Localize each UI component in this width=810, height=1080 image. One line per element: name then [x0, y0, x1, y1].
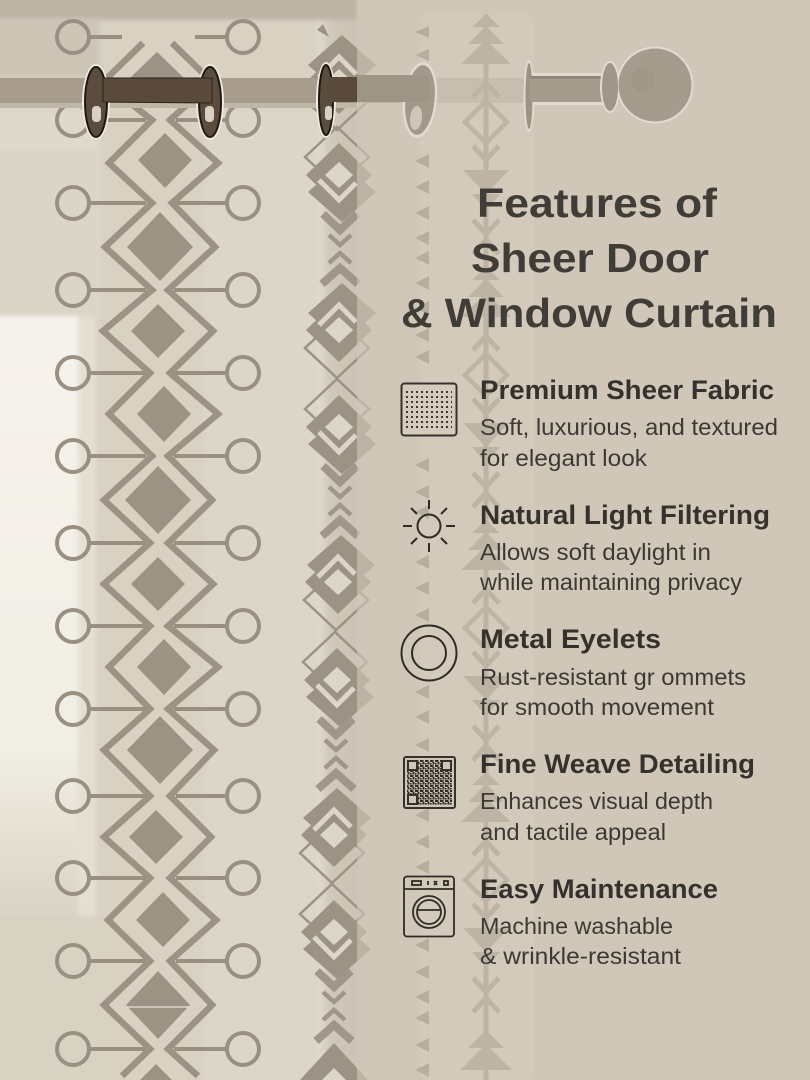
- feature text: premium sheer fabric: Soft, luxurious, and textured: [480, 414, 778, 440]
- feature text: metal eyelets: [480, 624, 746, 720]
- feature: easy maintenance: [404, 874, 718, 969]
- light sheer curtain panel: [420, 14, 534, 1080]
- rings and connectors, right side: [174, 21, 259, 1065]
- curtain pattern: stacked diamond column: [300, 24, 376, 1080]
- feature text: natural light filtering: while maintaining privacy: [479, 569, 742, 595]
- feature text: easy maintenance: [480, 874, 718, 969]
- feature text: natural light filtering: [479, 500, 770, 595]
- grommet: third: [316, 62, 336, 138]
- feature text: premium sheer fabric: Premium Sheer Fabric: [480, 375, 774, 405]
- feature text: fine weave detailing: Fine Weave Detailing: [480, 749, 755, 779]
- feature text: fine weave detailing: Enhances visual depth: [480, 788, 713, 814]
- feature: fine weave detailing: [404, 749, 755, 845]
- feature: natural light filtering: [403, 500, 770, 595]
- zigzag outlines: [103, 43, 218, 1076]
- title: Sheer Door: [471, 235, 709, 281]
- feature text: easy maintenance: & wrinkle-resistant: [480, 943, 681, 969]
- title: [401, 180, 777, 336]
- finial: [524, 46, 694, 132]
- feature text: premium sheer fabric: for elegant look: [480, 445, 647, 471]
- feature: metal eyelets: [402, 624, 746, 720]
- rod behind third grommet: [328, 77, 357, 102]
- feature text: premium sheer fabric: [480, 375, 778, 471]
- grommet: right: [196, 64, 224, 140]
- feature text: fine weave detailing: [480, 749, 755, 845]
- grommet and rod inside panel: [357, 60, 441, 140]
- icon: eyelet: [402, 626, 456, 680]
- title: Features of: [477, 180, 717, 226]
- feature text: natural light filtering: Allows soft daylight in: [480, 539, 711, 565]
- feature text: natural light filtering: Natural Light Filtering: [480, 500, 770, 530]
- feature text: easy maintenance: Machine washable: [480, 913, 673, 939]
- curtain rod: [0, 78, 530, 108]
- title: & Window Curtain: [401, 290, 777, 336]
- icon: washing machine: [404, 876, 454, 936]
- icon: sun: [403, 500, 455, 552]
- arrow and diamond column: [460, 14, 512, 1080]
- feature text: metal eyelets: Metal Eyelets: [480, 624, 661, 654]
- triangle column: [415, 26, 429, 1077]
- grommet: left: [82, 64, 110, 140]
- dark rod between grommets: [103, 78, 212, 103]
- feature text: metal eyelets: for smooth movement: [480, 694, 714, 720]
- feature: premium sheer fabric: [402, 375, 778, 471]
- icon: woven qr-like square: [404, 757, 455, 808]
- eyelet-shaped rings and connectors, left side: [57, 21, 146, 1065]
- feature text: fine weave detailing: and tactile appeal: [480, 819, 666, 845]
- feature text: easy maintenance: Easy Maintenance: [480, 874, 718, 904]
- solid diamonds: [125, 52, 193, 1080]
- feature text: metal eyelets: Rust-resistant gr ommets: [480, 664, 746, 690]
- icon: fabric swatch: [402, 384, 456, 436]
- translucent text panel: [357, 0, 810, 1080]
- curtain pattern: left medallion column: [57, 21, 259, 1080]
